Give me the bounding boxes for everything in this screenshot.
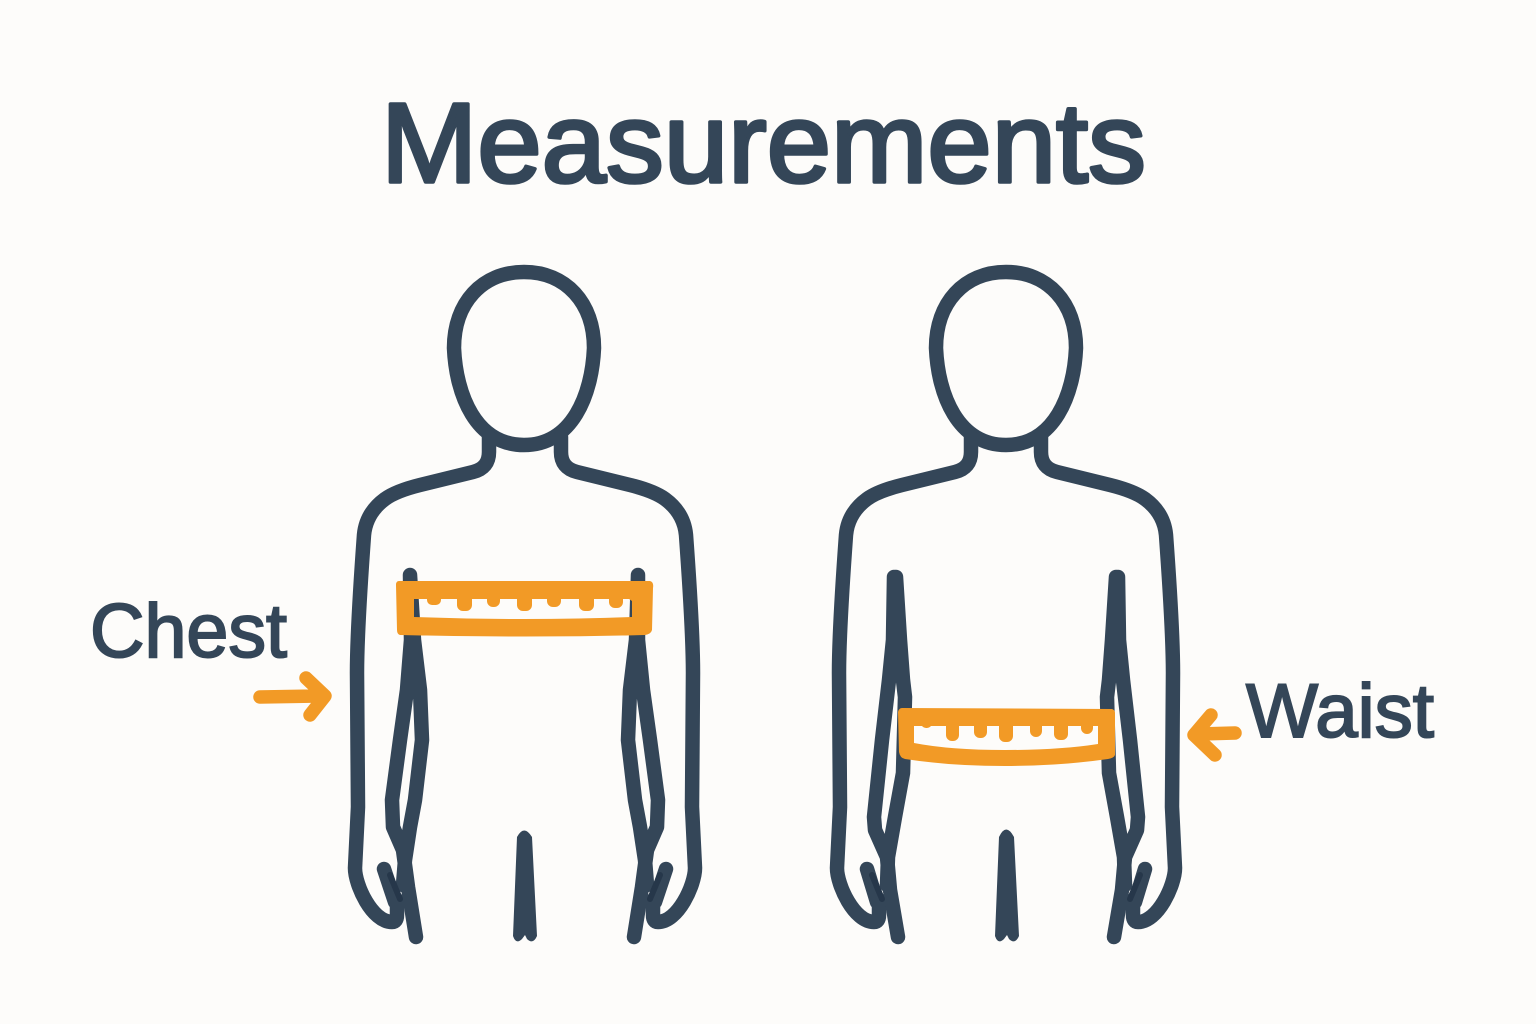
body left side xyxy=(355,437,489,937)
figure: chest measurement xyxy=(355,272,695,941)
body right side xyxy=(561,437,695,937)
measuring tape: waist xyxy=(898,708,1115,766)
body left side xyxy=(837,437,971,937)
title: Measurements xyxy=(381,80,1146,206)
figure: waist measurement xyxy=(837,272,1175,941)
measuring tape: chest xyxy=(396,581,653,636)
head xyxy=(454,272,594,445)
label: Waist: Waist xyxy=(1246,669,1434,754)
label: Chest: Chest xyxy=(90,589,287,674)
head xyxy=(936,272,1076,445)
crotch line xyxy=(513,830,537,941)
body right side xyxy=(1041,437,1175,937)
arrow: chest xyxy=(260,678,325,715)
arrow: waist xyxy=(1194,715,1235,755)
crotch line xyxy=(995,830,1019,941)
